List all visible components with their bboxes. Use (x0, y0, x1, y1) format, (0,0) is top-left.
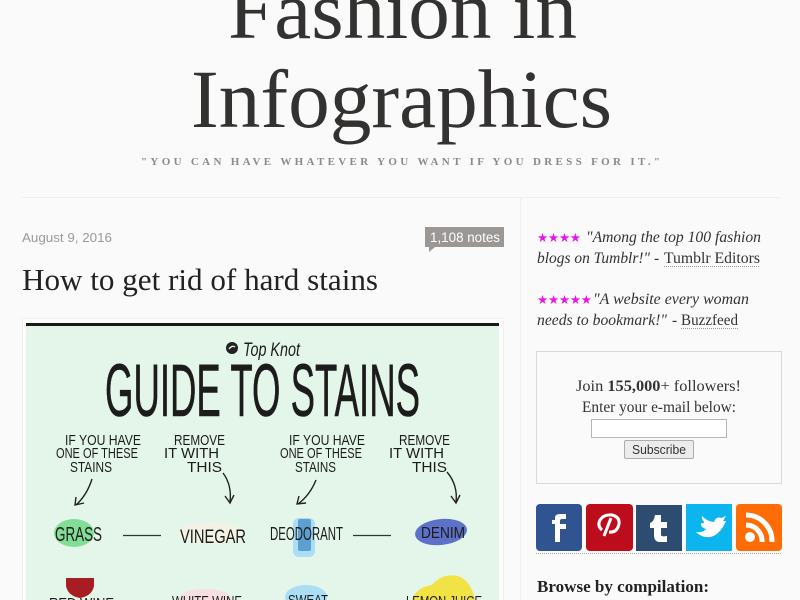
testimonial 2: - (672, 312, 677, 329)
vinegar: VINEGAR (180, 527, 246, 548)
followers text: Join 155,000+ followers! (576, 378, 741, 395)
column label 2: IT WITH (164, 445, 219, 462)
icon: pinterest (586, 504, 633, 551)
column label 3: STAINS (295, 459, 336, 476)
infographic image: guide to stains: GUIDE TO STAINS (105, 349, 420, 432)
icon: rss (736, 504, 782, 551)
column label 4: REMOVE (399, 432, 450, 449)
testimonial 2: ★★★★★ (537, 293, 592, 307)
arrow 3 (297, 480, 316, 504)
red wine stain (49, 578, 114, 600)
grass stain (54, 519, 102, 547)
brand: top knot (226, 340, 301, 361)
column label 1: STAINS (70, 459, 112, 476)
sweat (285, 585, 328, 600)
brand: top knot: Top Knot (243, 340, 301, 361)
lemon juice (406, 575, 482, 600)
notes badge: 1,108 notes (430, 230, 500, 245)
dash 1 (123, 534, 161, 536)
column label 1: ONE OF THESE (56, 445, 138, 462)
denim: DENIM (421, 525, 465, 542)
post date: August 9, 2016 (22, 230, 112, 245)
testimonial 2: Buzzfeed (681, 312, 738, 329)
email input (592, 420, 726, 438)
notes badge (425, 227, 504, 252)
column label 4 (389, 432, 450, 476)
denim (414, 516, 468, 548)
site title (191, 0, 612, 145)
testimonial 1: blogs on Tumblr!" (537, 250, 650, 267)
subscribe button (624, 440, 694, 458)
site title: Infographics (191, 53, 612, 145)
column label 4: THIS (412, 459, 447, 476)
column label 3: ONE OF THESE (280, 445, 362, 462)
column label 2 (164, 432, 225, 476)
grass stain: GRASS (55, 524, 102, 546)
column label 1 (56, 432, 141, 476)
post title: How to get rid of hard stains (22, 262, 378, 297)
deodorant (270, 518, 343, 557)
subscribe box (536, 352, 782, 484)
testimonial 1 (537, 229, 761, 267)
icon: twitter (686, 504, 732, 551)
email prompt: Enter your e-mail below: (582, 399, 736, 416)
column label 3 (280, 432, 365, 476)
white wine (172, 589, 242, 600)
testimonial 1: Tumblr Editors (664, 250, 760, 267)
column label 4: IT WITH (389, 445, 444, 462)
vinegar (178, 522, 246, 548)
column label 2: THIS (187, 459, 222, 476)
tagline: "YOU CAN HAVE WHATEVER YOU WANT IF YOU DRESS FOR IT." (141, 156, 660, 168)
arrow 2 (223, 473, 234, 503)
arrow 4 (447, 472, 460, 503)
icon: tumblr (636, 505, 682, 551)
testimonial 2: needs to bookmark!" (537, 312, 667, 329)
deodorant: DEODORANT (270, 524, 343, 544)
testimonial 1: - (654, 250, 659, 267)
subscribe button: Subscribe (632, 443, 686, 457)
arrow 1 (75, 479, 92, 505)
testimonial 2 (537, 291, 749, 329)
infographic image: guide to stains (22, 318, 504, 600)
column label 1: IF YOU HAVE (65, 432, 141, 449)
dash 2 (353, 534, 391, 536)
browse heading: Browse by compilation: (537, 577, 709, 596)
testimonial 1: ★★★★ (537, 231, 581, 245)
icon: facebook (536, 504, 582, 551)
column label 2: REMOVE (174, 432, 225, 449)
column label 3: IF YOU HAVE (289, 432, 365, 449)
testimonial 1: "Among the top 100 fashion (586, 229, 761, 246)
testimonial 2: "A website every woman (593, 291, 749, 308)
